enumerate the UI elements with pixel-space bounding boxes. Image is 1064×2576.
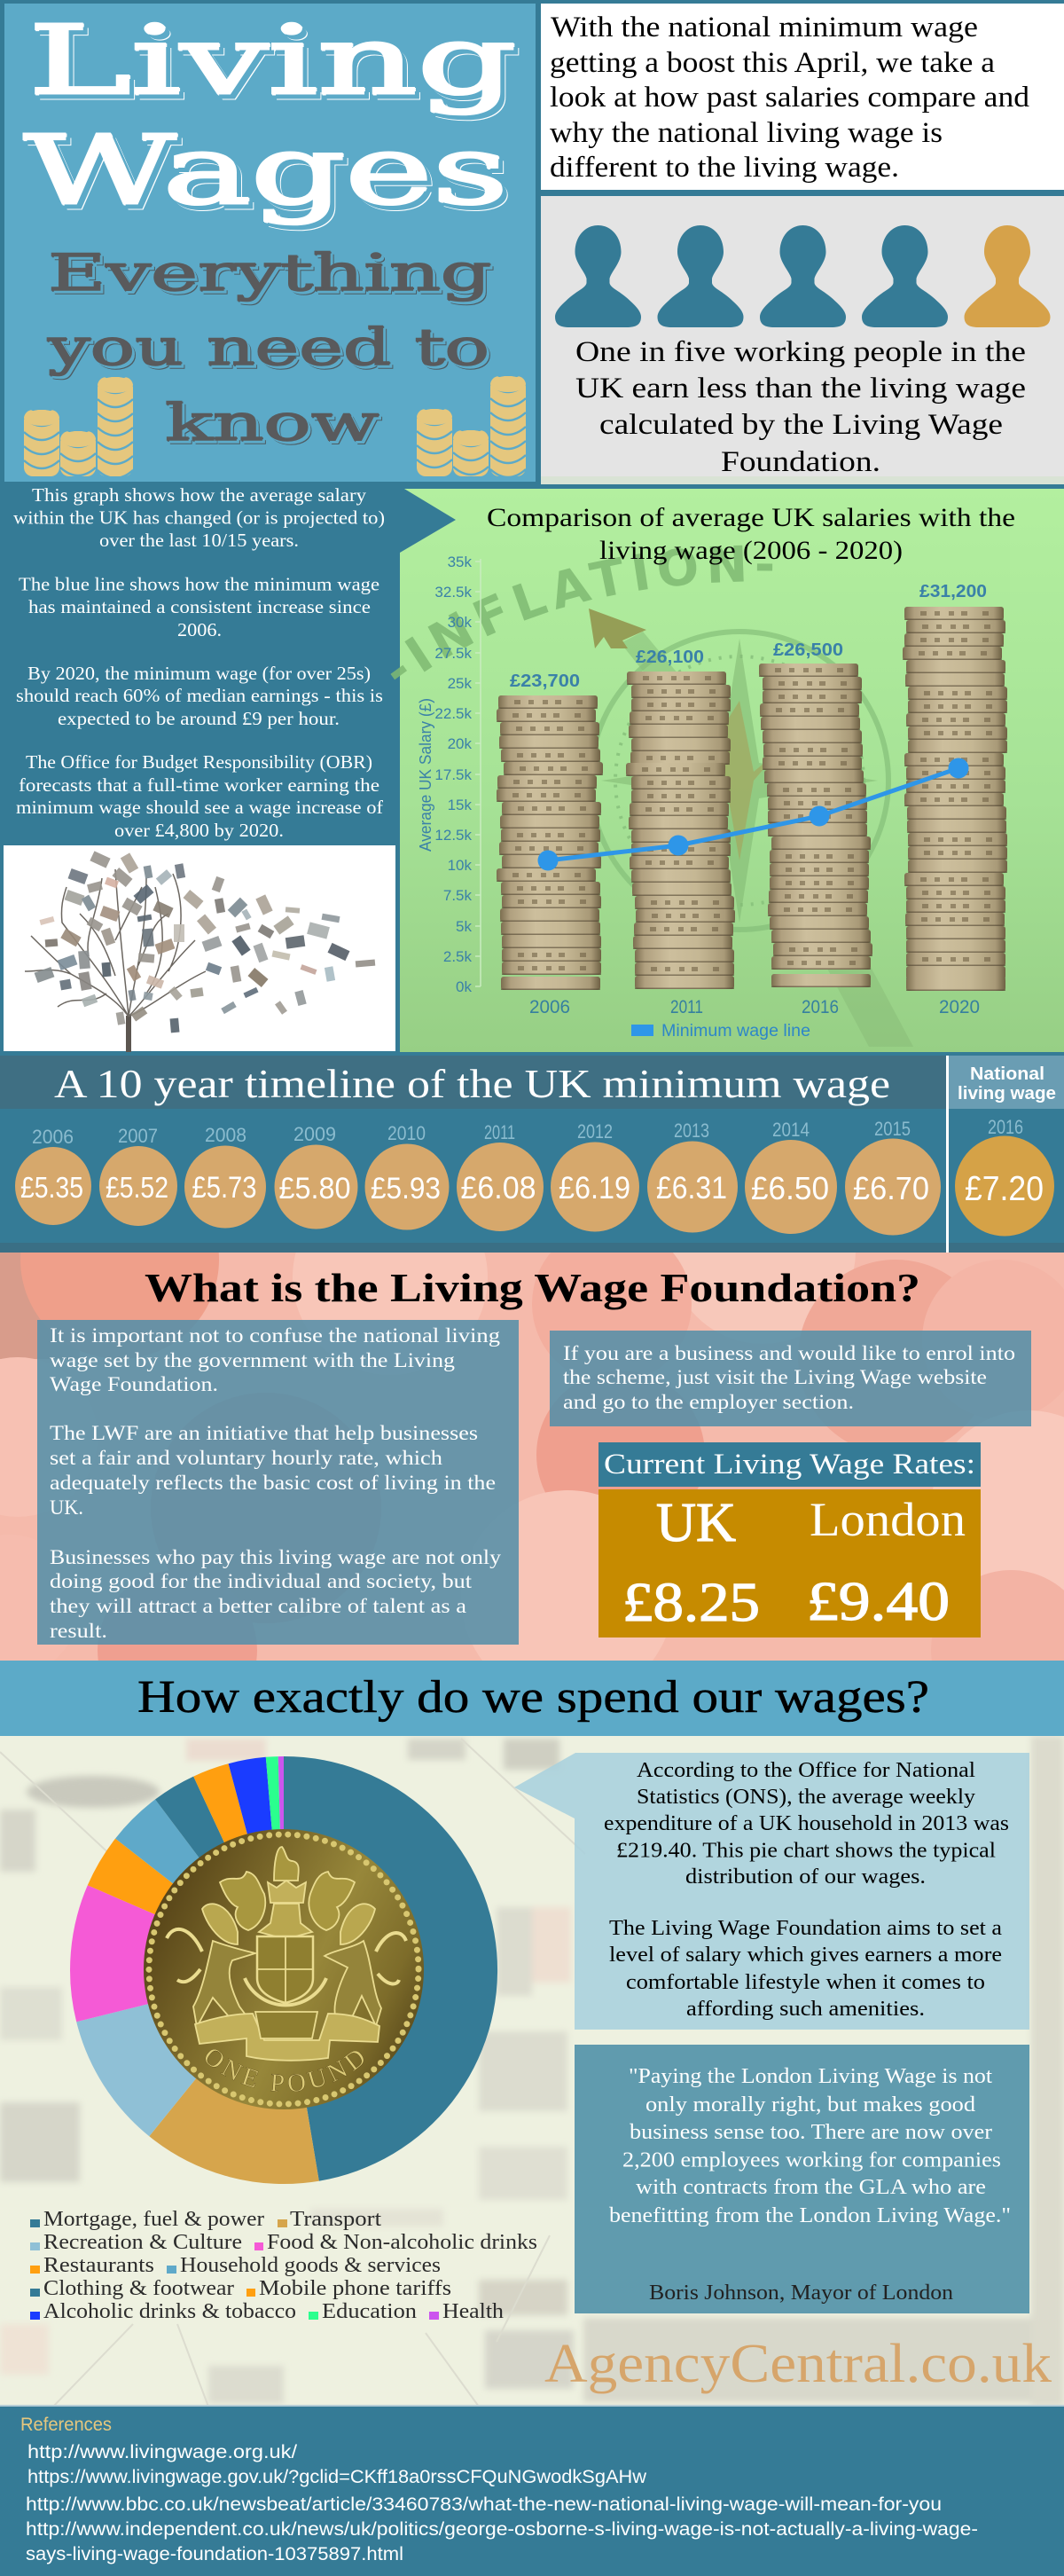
panel: current living wage rates: UK xyxy=(656,1493,736,1553)
callout: Boris Johnson quote: benefitting from the London Living Wage." xyxy=(609,2204,1011,2227)
panel: introduction xyxy=(541,4,1064,190)
panel: introduction: look at how past salaries compare and xyxy=(550,82,1030,114)
legend: pie chart categories: Food & Non-alcoholic drinks xyxy=(267,2231,537,2254)
background: pennies xyxy=(0,1253,1064,1661)
salary value labels: £26,100 xyxy=(636,648,704,667)
callout: ONS expenditure: expenditure of a UK household in 2013 was xyxy=(604,1812,1009,1835)
timeline year labels: 2009 xyxy=(293,1123,336,1145)
panel: salary graph explanation: forecasts that a full-time worker earning the xyxy=(19,774,379,796)
panel: current living wage rates: London xyxy=(810,1493,966,1546)
timeline year labels: 2012 xyxy=(577,1120,613,1143)
text: one in five statistic: Foundation. xyxy=(721,446,880,478)
y axis with labels: 30k xyxy=(448,614,472,631)
timeline year labels: 2011 xyxy=(484,1121,515,1143)
x axis labels: 2020 xyxy=(939,997,980,1017)
coin stack: 2020 xyxy=(903,607,1007,991)
subheading: Everything you need to know: know xyxy=(165,394,379,452)
y axis with labels: 0k xyxy=(456,978,472,995)
legend: pie chart categories xyxy=(30,2208,537,2323)
timeline wage coins: £5.80 xyxy=(278,1172,351,1206)
coin inscription: ONE POUND xyxy=(206,2049,364,2092)
callout: Boris Johnson quote: only morally right, but makes good xyxy=(645,2093,975,2117)
y axis with labels xyxy=(417,554,481,995)
panel: current living wage rates xyxy=(598,1442,981,1637)
x axis labels: 2011 xyxy=(670,997,703,1017)
heading: timeline: A 10 year timeline of the UK minimum wage xyxy=(54,1061,890,1106)
panel: references: References xyxy=(20,2415,112,2435)
panel: what is the Living Wage Foundation xyxy=(0,1253,1064,1661)
text box: about the Living Wage Foundation: wage set by the government with the Living xyxy=(50,1349,456,1371)
panel: current living wage rates: £9.40 xyxy=(807,1572,950,1632)
chart title: Comparison of average UK salaries with the xyxy=(487,503,1015,532)
panel: references: https://www.livingwage.gov.uk/?gclid=CKff18a0rssCFQuNGwodkSgAHw xyxy=(27,2467,647,2487)
salary value labels: £23,700 xyxy=(510,671,580,691)
panel: introduction: getting a boost this April, we take a xyxy=(550,47,995,79)
timeline wage coins: £6.08 xyxy=(461,1171,536,1206)
timeline year labels: 2010 xyxy=(387,1122,426,1144)
timeline wage coins: £5.52 xyxy=(106,1171,168,1204)
panel: salary graph explanation: over the last 10/15 years. xyxy=(99,530,299,551)
callout: ONS expenditure: Statistics (ONS), the average weekly xyxy=(637,1786,975,1809)
coat of arms xyxy=(167,1847,406,2061)
text box: about the Living Wage Foundation: UK. xyxy=(50,1496,83,1519)
coin stack: 2006 xyxy=(497,695,603,990)
chart panel: average salaries vs living wage xyxy=(390,489,1064,1052)
text box: about the Living Wage Foundation: set a fair and voluntary hourly rate, which xyxy=(50,1447,443,1469)
text box: about the Living Wage Foundation: they will attract a better calibre of talent as a xyxy=(50,1595,466,1617)
text box: enrol in the scheme: If you are a business and would like to enrol into xyxy=(563,1342,1015,1364)
timeline wage coins: £6.19 xyxy=(559,1171,630,1206)
panel: salary graph explanation: 2006. xyxy=(177,619,222,640)
heading: foundation: What is the Living Wage Foundation? xyxy=(145,1265,920,1310)
panel: salary graph explanation: over £4,800 by 2020. xyxy=(114,820,284,841)
panel: introduction: why the national living wage is xyxy=(550,117,943,149)
timeline wage coins: £6.70 xyxy=(853,1170,929,1206)
panel: references: http://www.independent.co.uk/news/uk/politics/george-osborne-s-living-wage-is-not-actually-a-living-wage- xyxy=(26,2519,978,2540)
callout: ONS expenditure: The Living Wage Foundation aims to set a xyxy=(609,1917,1002,1940)
panel: references xyxy=(0,2405,1064,2576)
text box: enrol in the scheme xyxy=(550,1331,1031,1426)
callout: ONS expenditure: £219.40. This pie chart shows the typical xyxy=(616,1840,996,1863)
text box: about the Living Wage Foundation: result. xyxy=(50,1620,107,1642)
y axis with labels: 35k xyxy=(448,554,472,570)
callout: Boris Johnson quote: 2,200 employees working for companies xyxy=(622,2148,1001,2172)
timeline year labels: 2013 xyxy=(674,1119,709,1142)
timeline year labels: 2007 xyxy=(118,1125,158,1147)
y axis with labels: 32.5k xyxy=(434,584,472,601)
panel: salary graph explanation: should reach 60% of median earnings - this is xyxy=(16,685,383,706)
subheading: Everything you need to know: Everything xyxy=(48,244,491,302)
icon: one pound coin xyxy=(144,1829,424,2109)
text box: about the Living Wage Foundation: The LWF are an initiative that help businesses xyxy=(50,1422,478,1444)
callout: ONS expenditure: level of salary which gives earners a more xyxy=(609,1944,1002,1967)
panel: salary graph explanation: expected to be around £9 per hour. xyxy=(58,708,340,729)
heading band: how exactly do we spend our wages xyxy=(0,1661,1064,1736)
coin stack: 2011 xyxy=(626,671,735,989)
label: national living wage: National xyxy=(970,1064,1044,1084)
text: one in five statistic: calculated by the Living Wage xyxy=(599,409,1003,441)
panel: one in five xyxy=(541,196,1064,484)
timeline wage coins: £6.31 xyxy=(656,1171,727,1206)
legend: pie chart categories: Clothing & footwear xyxy=(43,2277,234,2300)
callout: ONS expenditure xyxy=(514,1753,1029,2030)
timeline year labels: 2015 xyxy=(874,1118,911,1140)
line: minimum wage xyxy=(537,758,968,871)
panel: salary graph explanation xyxy=(13,484,385,841)
callout: ONS expenditure: comfortable lifestyle when it comes to xyxy=(626,1971,985,1994)
callout: ONS expenditure: According to the Office for National xyxy=(637,1759,975,1782)
y axis with labels: 25k xyxy=(448,675,472,692)
panel: references: says-living-wage-foundation-10375897.html xyxy=(26,2544,403,2564)
callout: ONS expenditure: distribution of our wages. xyxy=(685,1865,926,1889)
y axis with labels: 22.5k xyxy=(434,705,472,722)
legend: minimum wage line: Minimum wage line xyxy=(661,1022,810,1041)
panel: salary graph explanation: has maintained a consistent increase since xyxy=(28,596,371,617)
panel: current living wage rates: Current Living Wage Rates: xyxy=(604,1449,975,1480)
text box: about the Living Wage Foundation: adequately reflects the basic cost of living in the xyxy=(50,1472,496,1494)
salary value labels xyxy=(510,582,987,691)
callout: ONS expenditure: affording such amenities. xyxy=(686,1998,925,2021)
x axis labels: 2016 xyxy=(802,997,839,1017)
salary value labels: £26,500 xyxy=(773,640,843,660)
heading: Wages: Wages xyxy=(24,116,508,226)
y axis with labels: 10k xyxy=(448,857,472,874)
legend: pie chart categories: Mobile phone tariffs xyxy=(259,2277,451,2300)
legend: pie chart categories: Alcoholic drinks & tobacco xyxy=(43,2300,296,2323)
panel: 10 year timeline xyxy=(0,1056,1064,1253)
timeline wage coins xyxy=(15,1135,1054,1237)
callout: Boris Johnson quote: Boris Johnson, Mayor of London xyxy=(649,2281,953,2305)
illustration: money tree xyxy=(4,845,395,1052)
legend: pie chart categories: Restaurants xyxy=(43,2254,154,2277)
text box: enrol in the scheme: the scheme, just visit the Living Wage website xyxy=(563,1366,987,1388)
y axis with labels: 12.5k xyxy=(434,827,472,844)
text box: about the Living Wage Foundation: Businesses who pay this living wage are not only xyxy=(50,1546,502,1568)
callout: Boris Johnson quote xyxy=(575,2045,1029,2313)
text box: about the Living Wage Foundation xyxy=(37,1320,519,1645)
legend: pie chart categories: Mortgage, fuel & power xyxy=(43,2208,264,2231)
timeline wage coins: £5.73 xyxy=(192,1171,257,1205)
subheading: Everything you need to know xyxy=(47,244,491,452)
pie chart: household expenditure xyxy=(70,1756,498,2184)
heading band: how exactly do we spend our wages: How exactly do we spend our wages? xyxy=(137,1672,929,1723)
legend: pie chart categories: Health xyxy=(442,2300,504,2323)
panel: salary graph explanation: minimum wage should see a wage increase of xyxy=(16,797,383,818)
text: one in five statistic xyxy=(575,336,1026,478)
text box: about the Living Wage Foundation: doing good for the individual and society, but xyxy=(50,1570,473,1592)
timeline year labels: 2014 xyxy=(772,1119,810,1141)
y axis with labels: 27.5k xyxy=(434,645,472,662)
icon: left coin stacks xyxy=(24,377,133,476)
label: national living wage xyxy=(958,1064,1056,1103)
coin stack: 2016 xyxy=(759,664,872,987)
y axis with labels: 20k xyxy=(448,735,472,752)
callout: Boris Johnson quote: with contracts from the GLA who are xyxy=(636,2176,986,2199)
heading: Living: Living xyxy=(28,6,516,116)
text: one in five statistic: One in five working people in the xyxy=(575,336,1026,368)
subheading: Everything you need to know: you need to xyxy=(47,318,489,377)
y axis with labels: 5k xyxy=(456,918,472,935)
background: banknotes xyxy=(0,1736,1064,2407)
timeline year labels xyxy=(32,1116,1023,1148)
panel: references: http://www.livingwage.org.uk/ xyxy=(27,2442,297,2462)
panel: references: http://www.bbc.co.uk/newsbeat/article/33460783/what-the-new-national-living-wage-will-mean-for-you xyxy=(26,2494,942,2515)
panel: salary graph explanation: within the UK has changed (or is projected to) xyxy=(13,507,385,529)
y axis with labels: 15k xyxy=(448,797,472,813)
timeline wage coins: £6.50 xyxy=(751,1170,829,1206)
chart title: living wage (2006 - 2020) xyxy=(599,536,903,565)
legend: pie chart categories: Household goods & services xyxy=(180,2254,441,2277)
panel: current living wage rates: £8.25 xyxy=(622,1573,760,1633)
timeline wage coins: £5.35 xyxy=(20,1171,83,1204)
timeline year labels: 2016 xyxy=(988,1116,1023,1138)
icon: right coin stacks xyxy=(417,376,526,476)
panel: salary graph explanation: The blue line shows how the minimum wage xyxy=(19,573,379,594)
chart title xyxy=(487,503,1015,565)
callout: Boris Johnson quote: business sense too. There are now over xyxy=(630,2121,992,2144)
label: national living wage: living wage xyxy=(958,1084,1056,1103)
callout: Boris Johnson quote: "Paying the London Living Wage is not xyxy=(629,2065,992,2088)
panel: salary graph explanation: The Office for Budget Responsibility (OBR) xyxy=(26,751,372,773)
y axis with labels: 17.5k xyxy=(434,766,472,783)
timeline year labels: 2006 xyxy=(32,1126,74,1148)
legend: pie chart categories: Transport xyxy=(290,2208,381,2231)
panel: salary graph explanation: This graph shows how the average salary xyxy=(32,484,367,506)
x axis labels xyxy=(529,997,980,1017)
background illustration: inflation compass xyxy=(390,545,913,1047)
timeline wage coins: £7.20 xyxy=(965,1170,1044,1208)
text: one in five statistic: UK earn less than the living wage xyxy=(575,373,1026,404)
panel: introduction: With the national minimum wage xyxy=(551,12,978,43)
salary value labels: £31,200 xyxy=(919,582,987,601)
y axis with labels: 2.5k xyxy=(443,948,472,965)
timeline wage coins: £5.93 xyxy=(371,1172,441,1206)
icon: five people, one highlighted xyxy=(555,225,1050,327)
text box: enrol in the scheme: and go to the employer section. xyxy=(563,1391,854,1413)
panel: salary graph explanation: By 2020, the minimum wage (for over 25s) xyxy=(27,663,371,684)
background illustration: inflation compass: -INFLATION- xyxy=(390,545,773,679)
timeline year labels: 2008 xyxy=(205,1124,246,1146)
legend: pie chart categories: Recreation & Culture xyxy=(43,2231,242,2254)
text box: about the Living Wage Foundation: Wage Foundation. xyxy=(50,1373,218,1395)
panel: introduction: different to the living wage. xyxy=(550,152,899,184)
logo: AgencyCentral.co.uk: AgencyCentral.co.uk xyxy=(544,2334,1052,2394)
panel: title xyxy=(4,4,536,482)
text box: about the Living Wage Foundation: It is important not to confuse the national living xyxy=(50,1324,501,1347)
x axis labels: 2006 xyxy=(529,997,570,1017)
legend: pie chart categories: Education xyxy=(322,2300,417,2323)
y axis with labels: Average UK Salary (£) xyxy=(417,698,434,852)
y axis with labels: 7.5k xyxy=(443,887,472,904)
